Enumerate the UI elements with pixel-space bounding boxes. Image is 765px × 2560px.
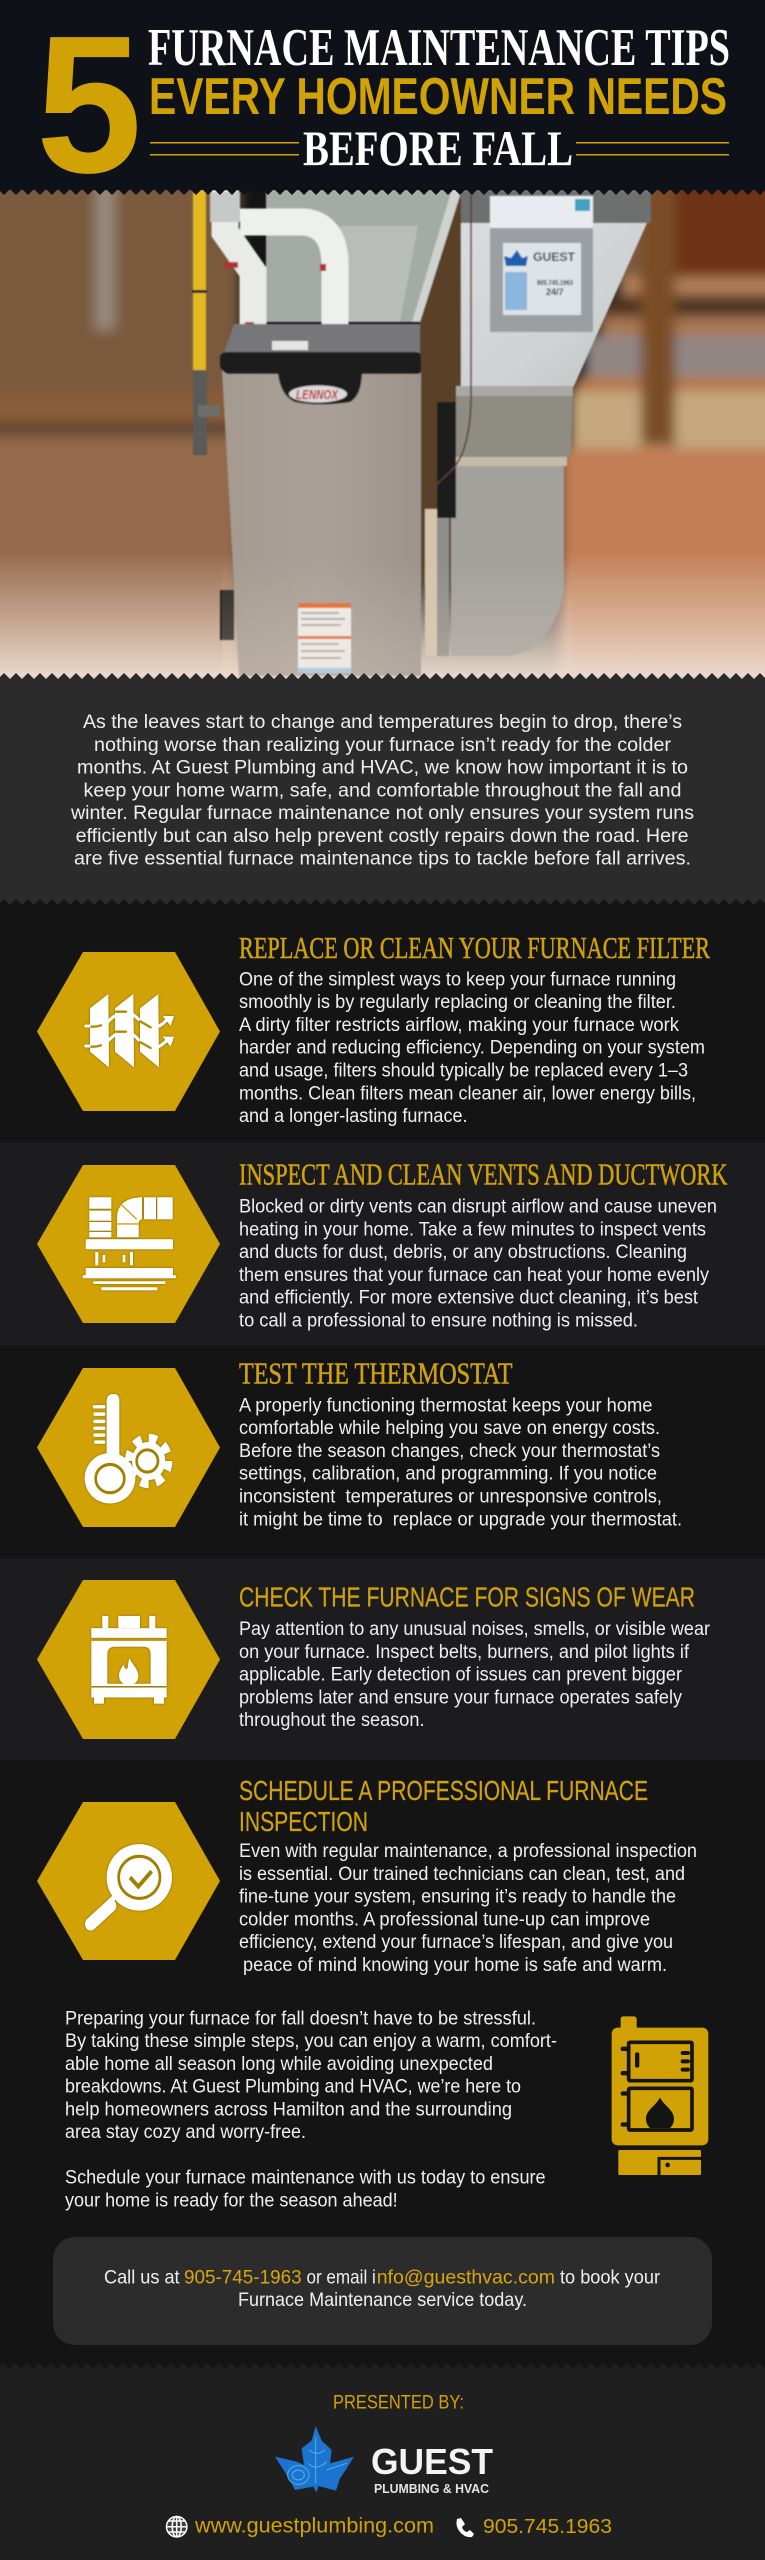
tip 2 text: and efficiently. For more extensive duct cleaning, it’s best xyxy=(239,1288,699,1309)
warning sticker xyxy=(298,603,351,673)
closing text: able home all season long while avoiding unexpected xyxy=(65,2053,493,2075)
phone number with handset icon: 905.745.1963 xyxy=(483,2515,612,2538)
closing text: Preparing your furnace for fall doesn’t have to be stressful. xyxy=(65,2007,536,2029)
tip 1 text: months. Clean filters mean cleaner air, lower energy bills, xyxy=(239,1083,696,1104)
call to action box xyxy=(53,2237,712,2345)
closing text: your home is ready for the season ahead! xyxy=(65,2189,398,2211)
closing text: breakdowns. At Guest Plumbing and HVAC, we’re here to xyxy=(65,2076,521,2098)
tip 3 text: inconsistent temperatures or unresponsive controls, xyxy=(239,1486,662,1508)
hexagon icon: air filter xyxy=(37,952,220,1111)
intro text: keep your home warm, safe, and comfortable throughout the fall and xyxy=(84,779,682,801)
tip 2 panel xyxy=(0,1142,765,1346)
intro text: efficiently but can also help prevent costly repairs down the road. Here xyxy=(76,825,689,847)
tip 5 heading: INSPECTION xyxy=(239,1806,368,1837)
furnace body xyxy=(224,324,420,353)
title line 3: BEFORE FALL xyxy=(303,120,573,176)
intro panel xyxy=(0,673,765,905)
tip 4 text: on your furnace. Inspect belts, burners, and pilot lights if xyxy=(239,1642,690,1663)
big number 5: 5 xyxy=(36,0,142,214)
tip 1 text: A dirty filter restricts airflow, making your furnace work xyxy=(239,1015,679,1036)
hexagon icon: thermostat xyxy=(37,1368,220,1527)
tip 5 heading xyxy=(239,1775,648,1837)
intro text: months. At Guest Plumbing and HVAC, we know how important it is to xyxy=(77,756,688,778)
footer panel xyxy=(0,2363,765,2560)
icon: phone xyxy=(456,2518,474,2537)
closing text xyxy=(65,2007,557,2211)
call to action text: to book your xyxy=(560,2266,660,2288)
tip 5 heading: SCHEDULE A PROFESSIONAL FURNACE xyxy=(239,1775,648,1806)
tip 3 text: Before the season changes, check your thermostat’s xyxy=(239,1441,660,1462)
tip 3 text: comfortable while helping you save on energy costs. xyxy=(239,1418,660,1439)
tip 5 text: Even with regular maintenance, a professional inspection xyxy=(239,1841,697,1862)
intro text: nothing worse than realizing your furnace isn’t ready for the colder xyxy=(94,734,672,756)
gas pipe xyxy=(193,185,206,370)
photo: furnace and ductwork: GUEST xyxy=(533,250,576,264)
tip 4 text xyxy=(239,1619,711,1731)
closing text: By taking these simple steps, you can enjoy a warm, comfort- xyxy=(65,2030,557,2052)
hexagon icon: fireplace xyxy=(37,1580,220,1739)
intro text: are five essential furnace maintenance tips to tackle before fall arrives. xyxy=(74,848,691,870)
tip 3 text: settings, calibration, and programming. If you notice xyxy=(239,1464,657,1485)
closing text: area stay cozy and worry-free. xyxy=(65,2121,306,2143)
hexagon icon: magnifier inspection xyxy=(37,1802,220,1960)
tip 4 text: problems later and ensure your furnace operates safely xyxy=(239,1687,682,1708)
tip 1 text: harder and reducing efficiency. Depending on your system xyxy=(239,1038,705,1059)
tip 5 text: colder months. A professional tune-up can improve xyxy=(239,1909,650,1930)
call to action text: Furnace Maintenance service today. xyxy=(238,2289,527,2311)
plenum duct xyxy=(461,189,651,223)
tip 3 text: it might be time to replace or upgrade your thermostat. xyxy=(239,1509,682,1530)
tip 1 panel xyxy=(0,905,765,1142)
call to action text: nfo@guesthvac.com xyxy=(377,2266,555,2288)
tip 2 text: them ensures that your furnace can heat your home evenly xyxy=(239,1265,709,1286)
tip 2 text: Blocked or dirty vents can disrupt airflow and cause uneven xyxy=(239,1197,717,1218)
tip 1 text: and a longer-lasting furnace. xyxy=(239,1106,468,1127)
call to action text: Call us at xyxy=(104,2266,180,2288)
gap behind furnace xyxy=(420,185,462,585)
presented by label: PRESENTED BY: xyxy=(333,2392,464,2414)
intro text xyxy=(70,711,694,870)
icon: boiler furnace xyxy=(612,2016,708,2176)
tip 5 text xyxy=(239,1841,697,1976)
tip 4 text: throughout the season. xyxy=(239,1710,424,1731)
tip 3 text: A properly functioning thermostat keeps your home xyxy=(239,1395,652,1416)
tip 5 text: peace of mind knowing your home is safe and warm. xyxy=(243,1955,667,1976)
tip 3 text xyxy=(239,1395,682,1530)
closing text: Schedule your furnace maintenance with us today to ensure xyxy=(65,2166,546,2188)
hexagon icon: ductwork xyxy=(37,1165,220,1323)
tip 1 text: smoothly is by regularly replacing or cleaning the filter. xyxy=(239,992,676,1013)
tip 1 text: One of the simplest ways to keep your furnace running xyxy=(239,969,676,990)
logo: guest plumbing and hvac xyxy=(275,2426,493,2496)
photo: furnace and ductwork: 24/7 xyxy=(546,287,564,297)
tip 1 text xyxy=(239,969,705,1127)
photo: furnace and ductwork xyxy=(0,180,765,695)
tip 3 heading: TEST THE THERMOSTAT xyxy=(239,1357,513,1391)
exhaust and intake pipes xyxy=(225,190,253,338)
logo: guest plumbing and hvac: GUEST xyxy=(371,2441,493,2482)
intro text: winter. Regular furnace maintenance not only ensures your system runs xyxy=(70,802,694,824)
tip 2 text: heating in your home. Take a few minutes to inspect vents xyxy=(239,1219,706,1240)
call to action text xyxy=(104,2266,660,2311)
tip 5 text: efficiency, extend your furnace’s lifespan, and give you xyxy=(239,1932,673,1953)
intro text: As the leaves start to change and temperatures begin to drop, there’s xyxy=(83,711,682,733)
tip 5 text: is essential. Our trained technicians can clean, test, and xyxy=(239,1864,685,1885)
call to action text: or email i xyxy=(306,2266,376,2288)
tip 2 text: to call a professional to ensure nothing is missed. xyxy=(239,1310,638,1332)
lower duct xyxy=(456,388,573,457)
tip 4 panel xyxy=(0,1558,765,1760)
photo: furnace and ductwork: LENNOX xyxy=(296,387,339,402)
icon: globe xyxy=(166,2516,187,2537)
tip 2 text xyxy=(239,1197,717,1332)
photo: furnace and ductwork: 905.745.1963 xyxy=(537,280,573,287)
icon: maple leaf xyxy=(275,2426,354,2493)
furnace badge xyxy=(289,386,347,402)
coil box xyxy=(266,189,462,322)
website link with globe icon: www.guestplumbing.com xyxy=(194,2514,434,2538)
tip 4 text: Pay attention to any unusual noises, smells, or visible wear xyxy=(239,1619,711,1640)
tip 2 text: and ducts for dust, debris, or any obstructions. Cleaning xyxy=(239,1242,687,1263)
tip 3 panel xyxy=(0,1346,765,1558)
logo: guest plumbing and hvac: PLUMBING & HVAC xyxy=(374,2482,489,2496)
closing text: help homeowners across Hamilton and the surrounding xyxy=(65,2098,512,2120)
tip 4 text: applicable. Early detection of issues can prevent bigger xyxy=(239,1665,683,1686)
tip 5 text: fine-tune your system, ensuring it’s ready to handle the xyxy=(239,1887,676,1908)
call to action text: 905-745-1963 xyxy=(184,2266,302,2288)
header banner xyxy=(0,0,765,214)
tip 1 text: and usage, filters should typically be replaced every 1–3 xyxy=(239,1060,688,1082)
tip 5 panel xyxy=(37,1775,697,1976)
duct sign xyxy=(490,228,594,332)
